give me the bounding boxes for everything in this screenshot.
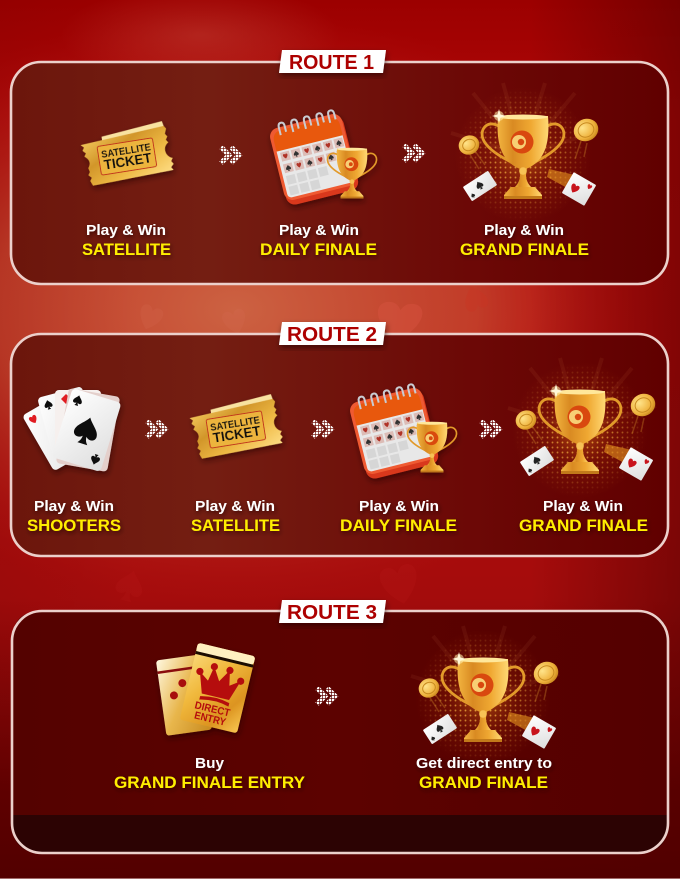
label: grand finale: Play & Win [484,222,564,239]
route 2 frame [11,334,668,556]
label: get direct entry: Get direct entry to [416,755,552,772]
heading: route 3: ROUTE 3 [287,602,377,624]
step: grand finale [508,358,659,535]
label: satellite [82,222,171,259]
step: satellite [79,120,175,259]
icon: golden trophy [508,358,659,498]
label: shooters: SHOOTERS [27,516,121,535]
arrow [147,421,165,437]
label: grand finale [460,222,589,259]
label: satellite [191,498,280,535]
icon: calendar with trophy [267,108,377,207]
icon: satellite ticket [79,120,175,187]
label: daily finale: DAILY FINALE [260,240,377,259]
step: daily finale [340,382,457,535]
icon: satellite ticket: TICKET [212,422,262,446]
route 3 frame [12,611,668,853]
label: daily finale: Play & Win [359,498,439,515]
step: daily finale [260,108,377,259]
label: satellite: Play & Win [86,222,166,239]
label: shooters: Play & Win [34,498,114,515]
icon: satellite ticket: TICKET [103,149,153,173]
label: grand finale: Play & Win [543,498,623,515]
label: buy entry: GRAND FINALE ENTRY [114,773,306,792]
arrow [317,688,335,704]
arrow [481,421,499,437]
icon: golden trophy [451,83,602,223]
label: grand finale: GRAND FINALE [460,240,589,259]
heading: route 2: ROUTE 2 [287,324,377,346]
step: buy grand finale entry [114,643,306,792]
route 1 frame [11,62,668,284]
arrow [313,421,331,437]
label: satellite: SATELLITE [191,516,280,535]
step: grand finale [451,83,602,259]
heading: route 1: ROUTE 1 [289,52,374,74]
icon: calendar with trophy [347,382,457,481]
panel: route 1 [11,50,668,284]
label: satellite: SATELLITE [82,240,171,259]
label: satellite: Play & Win [195,498,275,515]
label: grand finale: GRAND FINALE [519,516,648,535]
label: shooters [27,498,121,535]
step: direct entry to grand finale [411,626,562,792]
icon: direct entry tickets [156,643,255,736]
icon: satellite ticket [188,393,284,460]
label: buy entry [114,755,306,792]
label: grand finale [519,498,648,535]
icon: satellite ticket: SATELLITE [210,415,261,434]
step: shooters [22,386,121,535]
icon: satellite ticket: SATELLITE [101,142,152,161]
label: daily finale: Play & Win [279,222,359,239]
step: satellite [188,393,284,535]
label: daily finale [340,498,457,535]
panel: route 3 [12,600,668,853]
icon: direct entry tickets: ENTRY [193,710,227,729]
label: get direct entry: GRAND FINALE [419,773,548,792]
label: daily finale [260,222,377,259]
icon: fan of playing cards [22,386,121,472]
arrow [404,145,422,161]
label: buy entry: Buy [195,755,225,772]
icon: direct entry tickets: DIRECT [193,699,232,720]
icon: golden trophy [411,626,562,766]
label: get direct entry [416,755,552,792]
arrow [221,147,239,163]
panel: route 2 [11,322,668,556]
label: daily finale: DAILY FINALE [340,516,457,535]
